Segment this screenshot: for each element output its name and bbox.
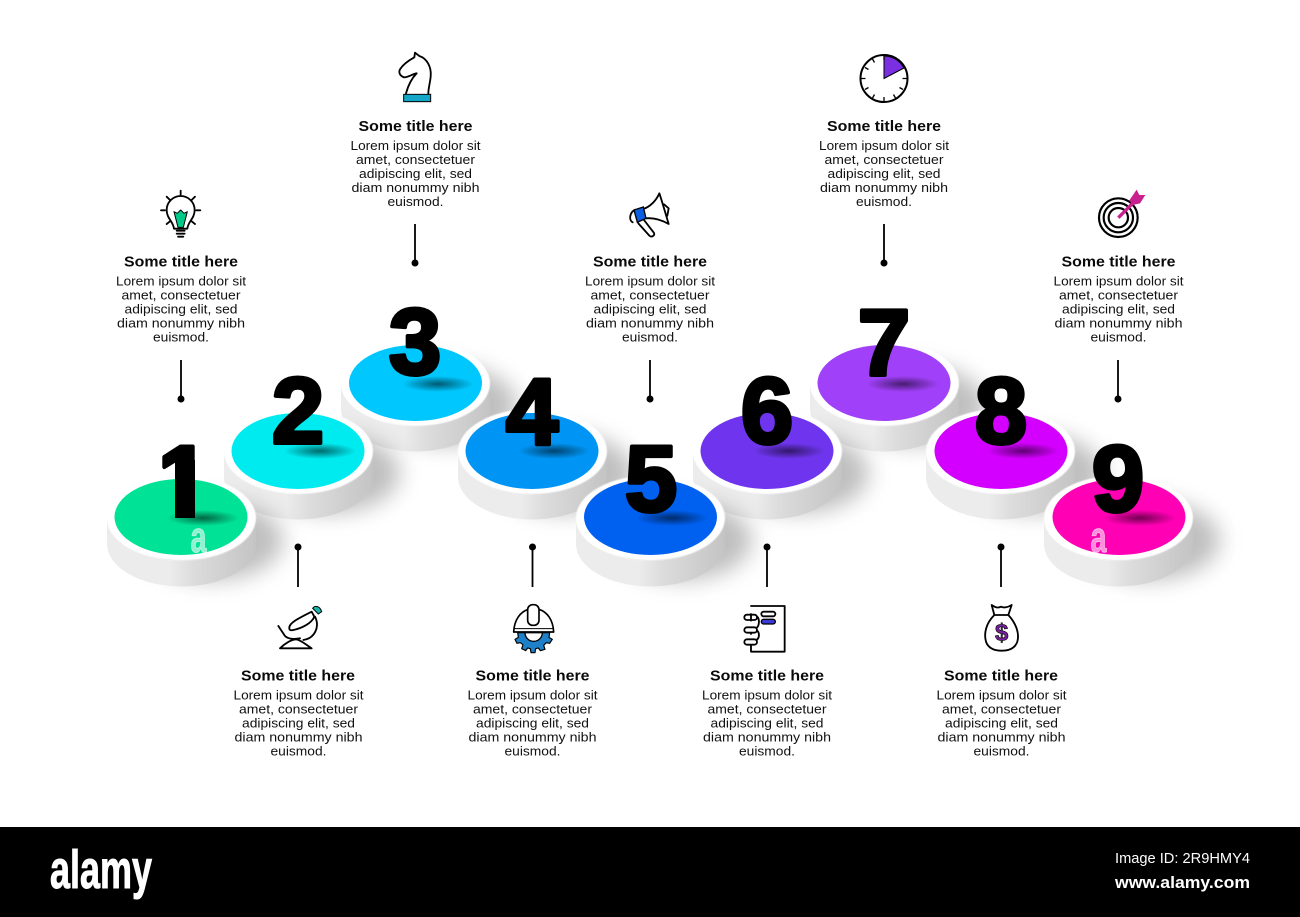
footer bar [0,827,1300,917]
disc 7 [810,290,986,452]
disc 2 [224,358,400,520]
text block 1: amet, consectetuer [122,288,240,302]
icon: megaphone [630,193,669,236]
text block 1: euismod. [153,330,209,344]
text block 8: amet, consectetuer [942,702,1061,716]
disc 5: 5 [625,426,677,531]
text block 3 [350,118,481,209]
text block 8 [936,668,1067,758]
connector 3 [412,224,418,266]
text block 7: amet, consectetuer [824,153,944,167]
text block 1 [116,254,247,344]
text block 8: adipiscing elit, sed [945,716,1058,730]
text block 8: euismod. [974,744,1030,758]
connector 4 [529,544,536,587]
text block 9: diam nonummy nibh [1054,316,1183,330]
text block 7 [819,118,950,209]
text block 3: amet, consectetuer [356,153,475,167]
disc 1: a [190,513,207,562]
text block 4: adipiscing elit, sed [476,716,589,730]
text block 2: Some title here [241,668,355,684]
text block 1: Lorem ipsum dolor sit [116,274,247,288]
connector 9 [1114,360,1122,402]
text block 7: diam nonummy nibh [820,181,948,195]
text block 4: Some title here [476,668,590,684]
disc 1 [107,426,283,586]
icon: light bulb [161,191,200,237]
text block 8: Lorem ipsum dolor sit [936,688,1067,702]
disc 3: 3 [389,289,441,394]
text block 7: adipiscing elit, sed [828,167,941,181]
text block 7: Lorem ipsum dolor sit [819,139,950,153]
disc 5 [576,426,752,586]
text block 6: adipiscing elit, sed [710,716,824,730]
icon: clock [860,55,908,102]
text block 9: euismod. [1090,330,1146,344]
text block 4: euismod. [504,744,560,758]
website: www.alamy.com [1114,873,1250,892]
text block 6: diam nonummy nibh [703,730,831,744]
icon: notebook [744,606,785,652]
text block 8: Some title here [944,668,1058,684]
text block 9 [1054,254,1184,344]
text block 5: adipiscing elit, sed [594,302,707,316]
connector 2 [294,544,302,587]
text block 4: diam nonummy nibh [468,730,597,744]
text block 5: amet, consectetuer [590,288,710,302]
text block 5: Lorem ipsum dolor sit [585,274,716,288]
text block 3: euismod. [388,195,444,209]
text block 2: diam nonummy nibh [234,730,363,744]
icon: microscope [278,606,322,648]
text block 2: euismod. [270,744,326,758]
text block 5: Some title here [593,254,707,270]
disc 7: 7 [858,290,910,395]
disc 8: 8 [975,358,1027,463]
text block 4: Lorem ipsum dolor sit [468,688,598,702]
disc 9: 9 [1092,426,1144,531]
text block 6: euismod. [739,744,795,758]
text block 2 [234,668,364,758]
icon: chess knight [399,53,431,102]
disc 2: 2 [272,358,324,463]
text block 9: Lorem ipsum dolor sit [1054,274,1184,288]
text block 3: diam nonummy nibh [352,181,480,195]
text block 4: amet, consectetuer [473,702,592,716]
icon: target with dart [1099,190,1145,237]
text block 9: adipiscing elit, sed [1062,302,1175,316]
connector 6 [764,544,770,587]
text block 3: Some title here [358,118,472,135]
disc 3 [341,289,517,452]
disc 9 [1044,426,1220,586]
icon: money bag: $ [995,620,1008,647]
text block 6: Lorem ipsum dolor sit [702,688,833,702]
disc 8 [926,358,1103,520]
connector 8 [998,544,1004,587]
disc 4 [458,359,634,519]
disc 9: a [1090,513,1107,562]
text block 3: adipiscing elit, sed [359,167,472,181]
text block 1: adipiscing elit, sed [124,302,238,316]
text block 9: Some title here [1062,254,1176,270]
connector 7 [880,224,888,266]
text block 2: adipiscing elit, sed [242,716,355,730]
text block 5: euismod. [622,330,678,344]
icon: money bag [985,605,1018,651]
text block 5: diam nonummy nibh [586,316,714,330]
text block 1: Some title here [124,254,238,270]
icon: hard hat with gear [514,605,554,653]
text block 1: diam nonummy nibh [117,316,245,330]
alamy logo: alamy [50,840,152,900]
text block 7: euismod. [856,195,912,209]
disc 4: 4 [506,359,558,464]
text block 7: Some title here [827,118,941,135]
text block 6: Some title here [710,668,824,684]
text block 9: amet, consectetuer [1059,288,1178,302]
text block 2: amet, consectetuer [239,702,358,716]
connector 1 [178,360,184,402]
text block 2: Lorem ipsum dolor sit [234,688,364,702]
disc 1: 1 [158,426,210,531]
text block 6 [702,668,833,758]
image id: Image ID: 2R9HMY4 [1115,850,1250,867]
text block 5 [585,254,716,344]
text block 3: Lorem ipsum dolor sit [350,139,481,153]
text block 4 [468,668,598,758]
disc 6 [693,358,869,520]
connector 5 [646,360,654,402]
text block 6: amet, consectetuer [708,702,826,716]
text block 8: diam nonummy nibh [938,730,1066,744]
disc 6: 6 [741,358,793,463]
